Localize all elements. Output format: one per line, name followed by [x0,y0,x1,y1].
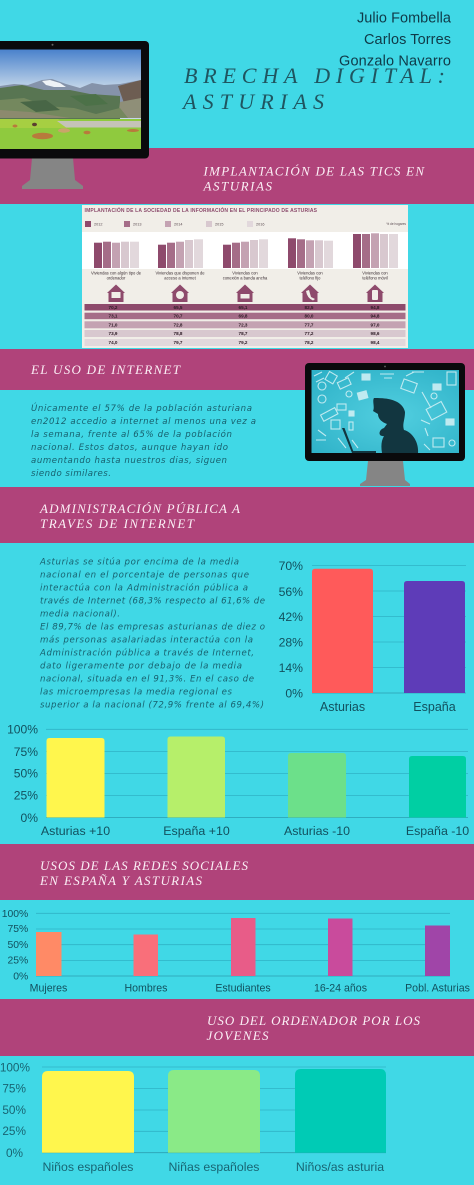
data rows: 73,9 [109,331,118,336]
bar chart: empresas: Asturias -10 [284,824,350,838]
axis labels: 25% [14,789,38,803]
authors: Carlos Torres [364,32,451,48]
bar chart: empresas [7,723,469,838]
axis labels: 28% [279,636,303,650]
monitor with Asturias landscape [0,41,149,189]
data rows: 78,8 [174,331,183,336]
category labels: conexión a banda ancha [223,276,268,280]
axis labels: 50% [2,1103,26,1117]
paragraph: administración pública: interactúa con la Administración pública a [40,582,248,594]
heading: implantación de las TICs [202,164,425,194]
category labels: Viviendas que disponen de [155,270,205,276]
paragraph: administración pública: dato ligeramente por debajo de la media [40,662,242,672]
paragraph: uso de internet: Únicamente el 57% de la población asturiana [31,402,252,414]
bar chart: redes sociales: Hombres [125,982,167,994]
year legend: % de hogares [386,222,406,226]
data rows: 94,8 [371,305,380,310]
bar chart: redes sociales: Mujeres [30,982,67,994]
axis labels [279,559,303,700]
axis labels: 25% [8,956,28,967]
heading: implantación de las TICs: ASTURIAS [202,178,272,194]
axis labels: 100% [0,1060,30,1074]
data rows: 80,0 [305,314,314,319]
heading: implantación de las TICs: IMPLANTACIÓN DE LAS TICS EN [202,164,425,178]
paragraph: administración pública: nacional en el porcentaje de personas que [40,570,249,580]
axis labels: 50% [14,767,38,781]
axis labels: 25% [2,1124,26,1138]
paragraph: administración pública: las microempresas la media regional es [40,688,233,698]
bar chart: years [82,232,408,269]
title [181,63,445,114]
heading: redes sociales: EN ESPAÑA Y ASTURIAS [39,873,202,888]
bar chart: empresas: España -10 [406,824,469,838]
table title: IMPLANTACIÓN DE LA SOCIEDAD DE LA INFORMACIÓN EN EL PRINCIPADO DE ASTURIAS [84,206,318,214]
data rows: 82,5 [305,305,314,310]
bar chart: Asturias vs España: Asturias [320,700,365,714]
icons: houses [107,284,384,302]
axis labels: 0% [13,972,28,983]
axis labels [7,723,38,825]
data rows: 65,1 [239,305,248,310]
bar chart: redes sociales: 16-24 años [314,982,367,994]
axis labels: 50% [8,940,28,951]
axis labels: 0% [21,811,38,825]
heading: uso del ordenador: JOVENES [206,1028,269,1043]
axis labels: 0% [6,1146,23,1160]
bar chart: ordenador: Niñas españoles [169,1160,259,1174]
heading: uso del ordenador [206,1013,420,1043]
title: ASTURIAS [181,89,324,114]
data rows: 98,4 [371,340,380,345]
axis labels: 75% [14,745,38,759]
monitor with silhouette [305,363,465,486]
paragraph: administración pública: Asturias se sitúa por encima de la media [39,558,239,568]
category labels: ordenador [107,276,126,280]
paragraph: administración pública: nacional, situada en el 91,3%. En el caso de [40,674,254,684]
authors [339,10,452,70]
bar chart: empresas: España +10 [163,824,230,838]
data rows: 70,7 [174,314,183,319]
bar chart: redes sociales: Estudiantes [215,982,271,994]
data rows: 78,7 [239,331,248,336]
axis labels: 0% [285,686,303,700]
category labels [91,270,388,280]
paragraph: uso de internet: en2012 accedio a internet al menos una vez a [31,417,256,427]
data rows: 70,2 [109,305,118,310]
heading: el uso de internet: EL USO DE INTERNET [30,362,181,377]
data rows: 74,0 [109,340,118,345]
authors: Gonzalo Navarro [339,54,451,70]
bar chart: redes sociales: Pobl. Asturias [405,982,470,994]
table infographic: sociedad de la información [82,205,408,348]
section banner: implantación [0,148,474,204]
paragraph: administración pública: superior a la nacional (72,9% frente al 69,4%) [40,700,264,710]
data rows: 72,3 [239,322,248,328]
paragraph: administración pública: más personas asalariadas interactúa con la [40,636,253,646]
bar chart: ordenador: Niños españoles [43,1160,133,1174]
year legend [85,221,406,227]
data rows: 78,2 [305,340,314,345]
heading: redes sociales: USOS DE LAS REDES SOCIALES [40,858,248,873]
paragraph: administración pública: Administración pública a través de Internet, [39,648,254,658]
data rows: 97,0 [371,322,380,328]
category labels: Viviendas con [232,270,258,276]
data rows: 98,6 [371,331,380,336]
section banner: redes sociales [0,844,474,900]
bar chart: Asturias vs España: España [413,700,456,714]
bar chart: ordenador [0,1060,386,1174]
year legend: 2012 [94,222,102,226]
category labels: teléfono móvil [362,276,388,280]
paragraph: uso de internet: la semana, frente al 65% de la población [31,429,232,440]
data rows: 71,0 [109,322,118,328]
axis labels: 42% [279,610,303,624]
axis labels: 75% [2,1082,26,1096]
heading: uso del ordenador: USO DEL ORDENADOR POR LOS [207,1013,420,1028]
axis labels: 70% [279,559,303,573]
bar chart: redes sociales [2,909,470,994]
paragraph: uso de internet [31,402,256,479]
paragraph: administración pública: El 89,7% de las empresas asturianas de diez o [40,622,265,632]
category labels: Viviendas con [362,270,388,276]
paragraph: uso de internet: aumentando hasta nuestros dias, siguen [31,456,227,466]
paragraph: administración pública [39,558,265,710]
axis labels [0,1060,30,1160]
category labels: acceso a Internet [164,276,197,280]
paragraph: administración pública: media nacional). [40,610,120,620]
data rows: 94,8 [371,314,380,319]
data rows: 72,8 [174,322,183,328]
axis labels: 100% [2,909,28,920]
paragraph: uso de internet: nacional. Estos datos, aunque hayan ido [31,443,228,453]
heading: administración pública: TRAVES DE INTERNET [40,516,195,531]
data rows: 79,7 [174,340,183,345]
heading: administración pública [39,501,240,531]
bar chart: Asturias vs España [279,559,466,714]
data rows [84,304,406,346]
year legend: 2014 [174,222,182,226]
data rows: 79,2 [239,340,248,345]
axis labels: 100% [7,723,38,737]
section banner: el uso de internet [0,349,474,390]
bar chart: empresas: Asturias +10 [41,824,110,838]
data rows: 77,7 [305,322,314,328]
authors: Julio Fombella [357,10,452,26]
heading: administración pública: ADMINISTRACIÓN PÚBLICA A [39,501,240,516]
data rows: 65,5 [174,305,183,310]
paragraph: uso de internet: siendo similares. [31,469,111,479]
category labels: teléfono fijo [300,276,321,280]
axis labels: 14% [279,661,303,675]
category labels: Viviendas con algún tipo de [91,270,142,276]
data rows: 73,1 [109,314,118,319]
title: BRECHA DIGITAL: [184,63,445,88]
year legend: 2016 [256,222,264,226]
axis labels: 75% [8,924,28,935]
axis labels: 56% [279,585,303,599]
section banner: administración pública [0,487,474,543]
paragraph: administración pública: través de Internet (68,3% respecto al 61,6% de [40,596,265,606]
axis labels [2,909,28,983]
year legend: 2013 [133,222,141,226]
data rows: 77,2 [305,331,314,336]
heading: redes sociales [39,858,248,888]
bar chart: ordenador: Niños/as asturia [296,1160,384,1174]
category labels: Viviendas con [297,270,323,276]
section banner: uso del ordenador [0,999,474,1056]
data rows: 69,8 [239,314,248,319]
year legend: 2015 [215,222,223,226]
